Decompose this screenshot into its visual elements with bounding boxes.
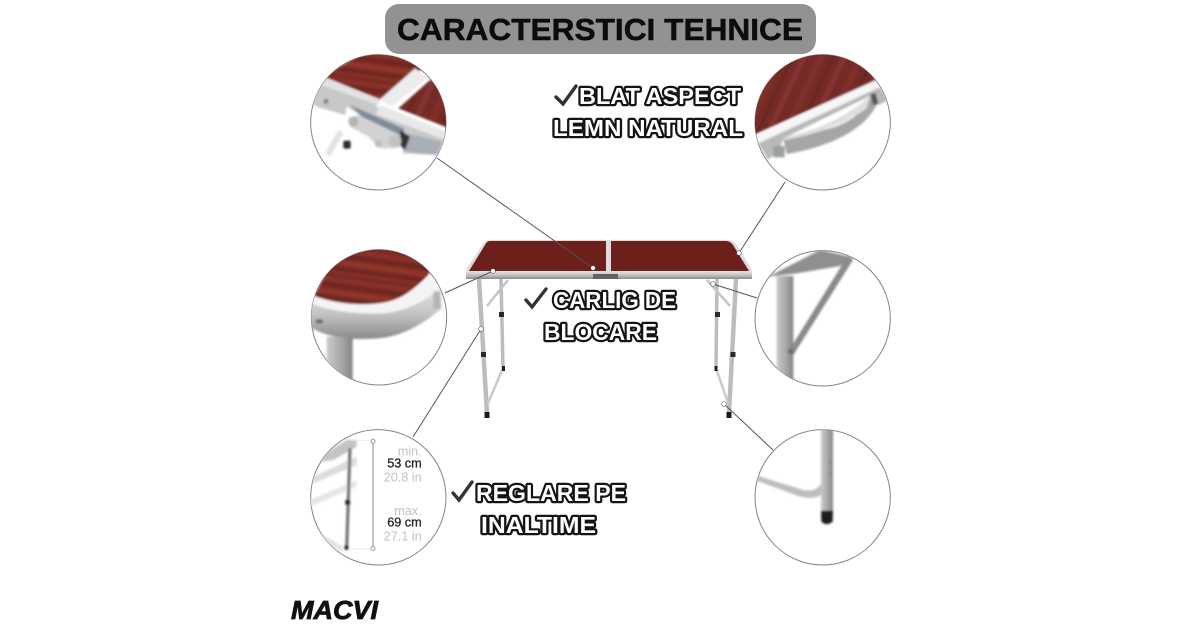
leader lines [413, 158, 785, 450]
height dimension [350, 439, 375, 550]
callout: wood-look top: LEMN NATURAL [553, 115, 743, 141]
detail circle: rounded corner [310, 247, 447, 397]
main table illustration [466, 240, 752, 418]
table legs [479, 279, 736, 418]
title text: CARACTERSTICI TEHNICE [397, 12, 803, 47]
icon: check mark [556, 86, 576, 104]
height labels: min. [398, 445, 422, 459]
brand logo: MACVI [291, 595, 379, 625]
table side profile [310, 440, 357, 552]
callout: locking hook: CARLIG DE [553, 287, 676, 313]
height labels: 27.1 in [384, 530, 422, 544]
title banner [385, 4, 816, 54]
height labels: 53 cm [387, 457, 422, 471]
detail circle: folding brace [755, 250, 890, 386]
height labels: 20.8 in [384, 471, 422, 485]
leader dots [479, 251, 741, 406]
height labels [384, 445, 422, 544]
callout: height adjustment: INALTIME [481, 512, 596, 538]
detail circle: rubber foot [755, 427, 890, 565]
callout: locking hook: BLOCARE [544, 319, 657, 345]
detail circle: height adjustment [310, 430, 446, 565]
callout: wood-look top [553, 83, 743, 141]
height labels: 69 cm [387, 516, 422, 530]
height labels: max. [394, 504, 422, 518]
table top [466, 240, 752, 279]
lock latch [593, 274, 618, 279]
callout: locking hook [526, 287, 676, 345]
callout: height adjustment [453, 480, 626, 538]
detail circle: folding hinge [310, 54, 446, 190]
callout: height adjustment: REGLARE PE [476, 480, 626, 506]
icon: check mark [453, 482, 472, 500]
icon: check mark [526, 289, 546, 307]
detail circle: handle [750, 50, 893, 190]
callout: wood-look top: BLAT ASPECT [579, 83, 741, 109]
